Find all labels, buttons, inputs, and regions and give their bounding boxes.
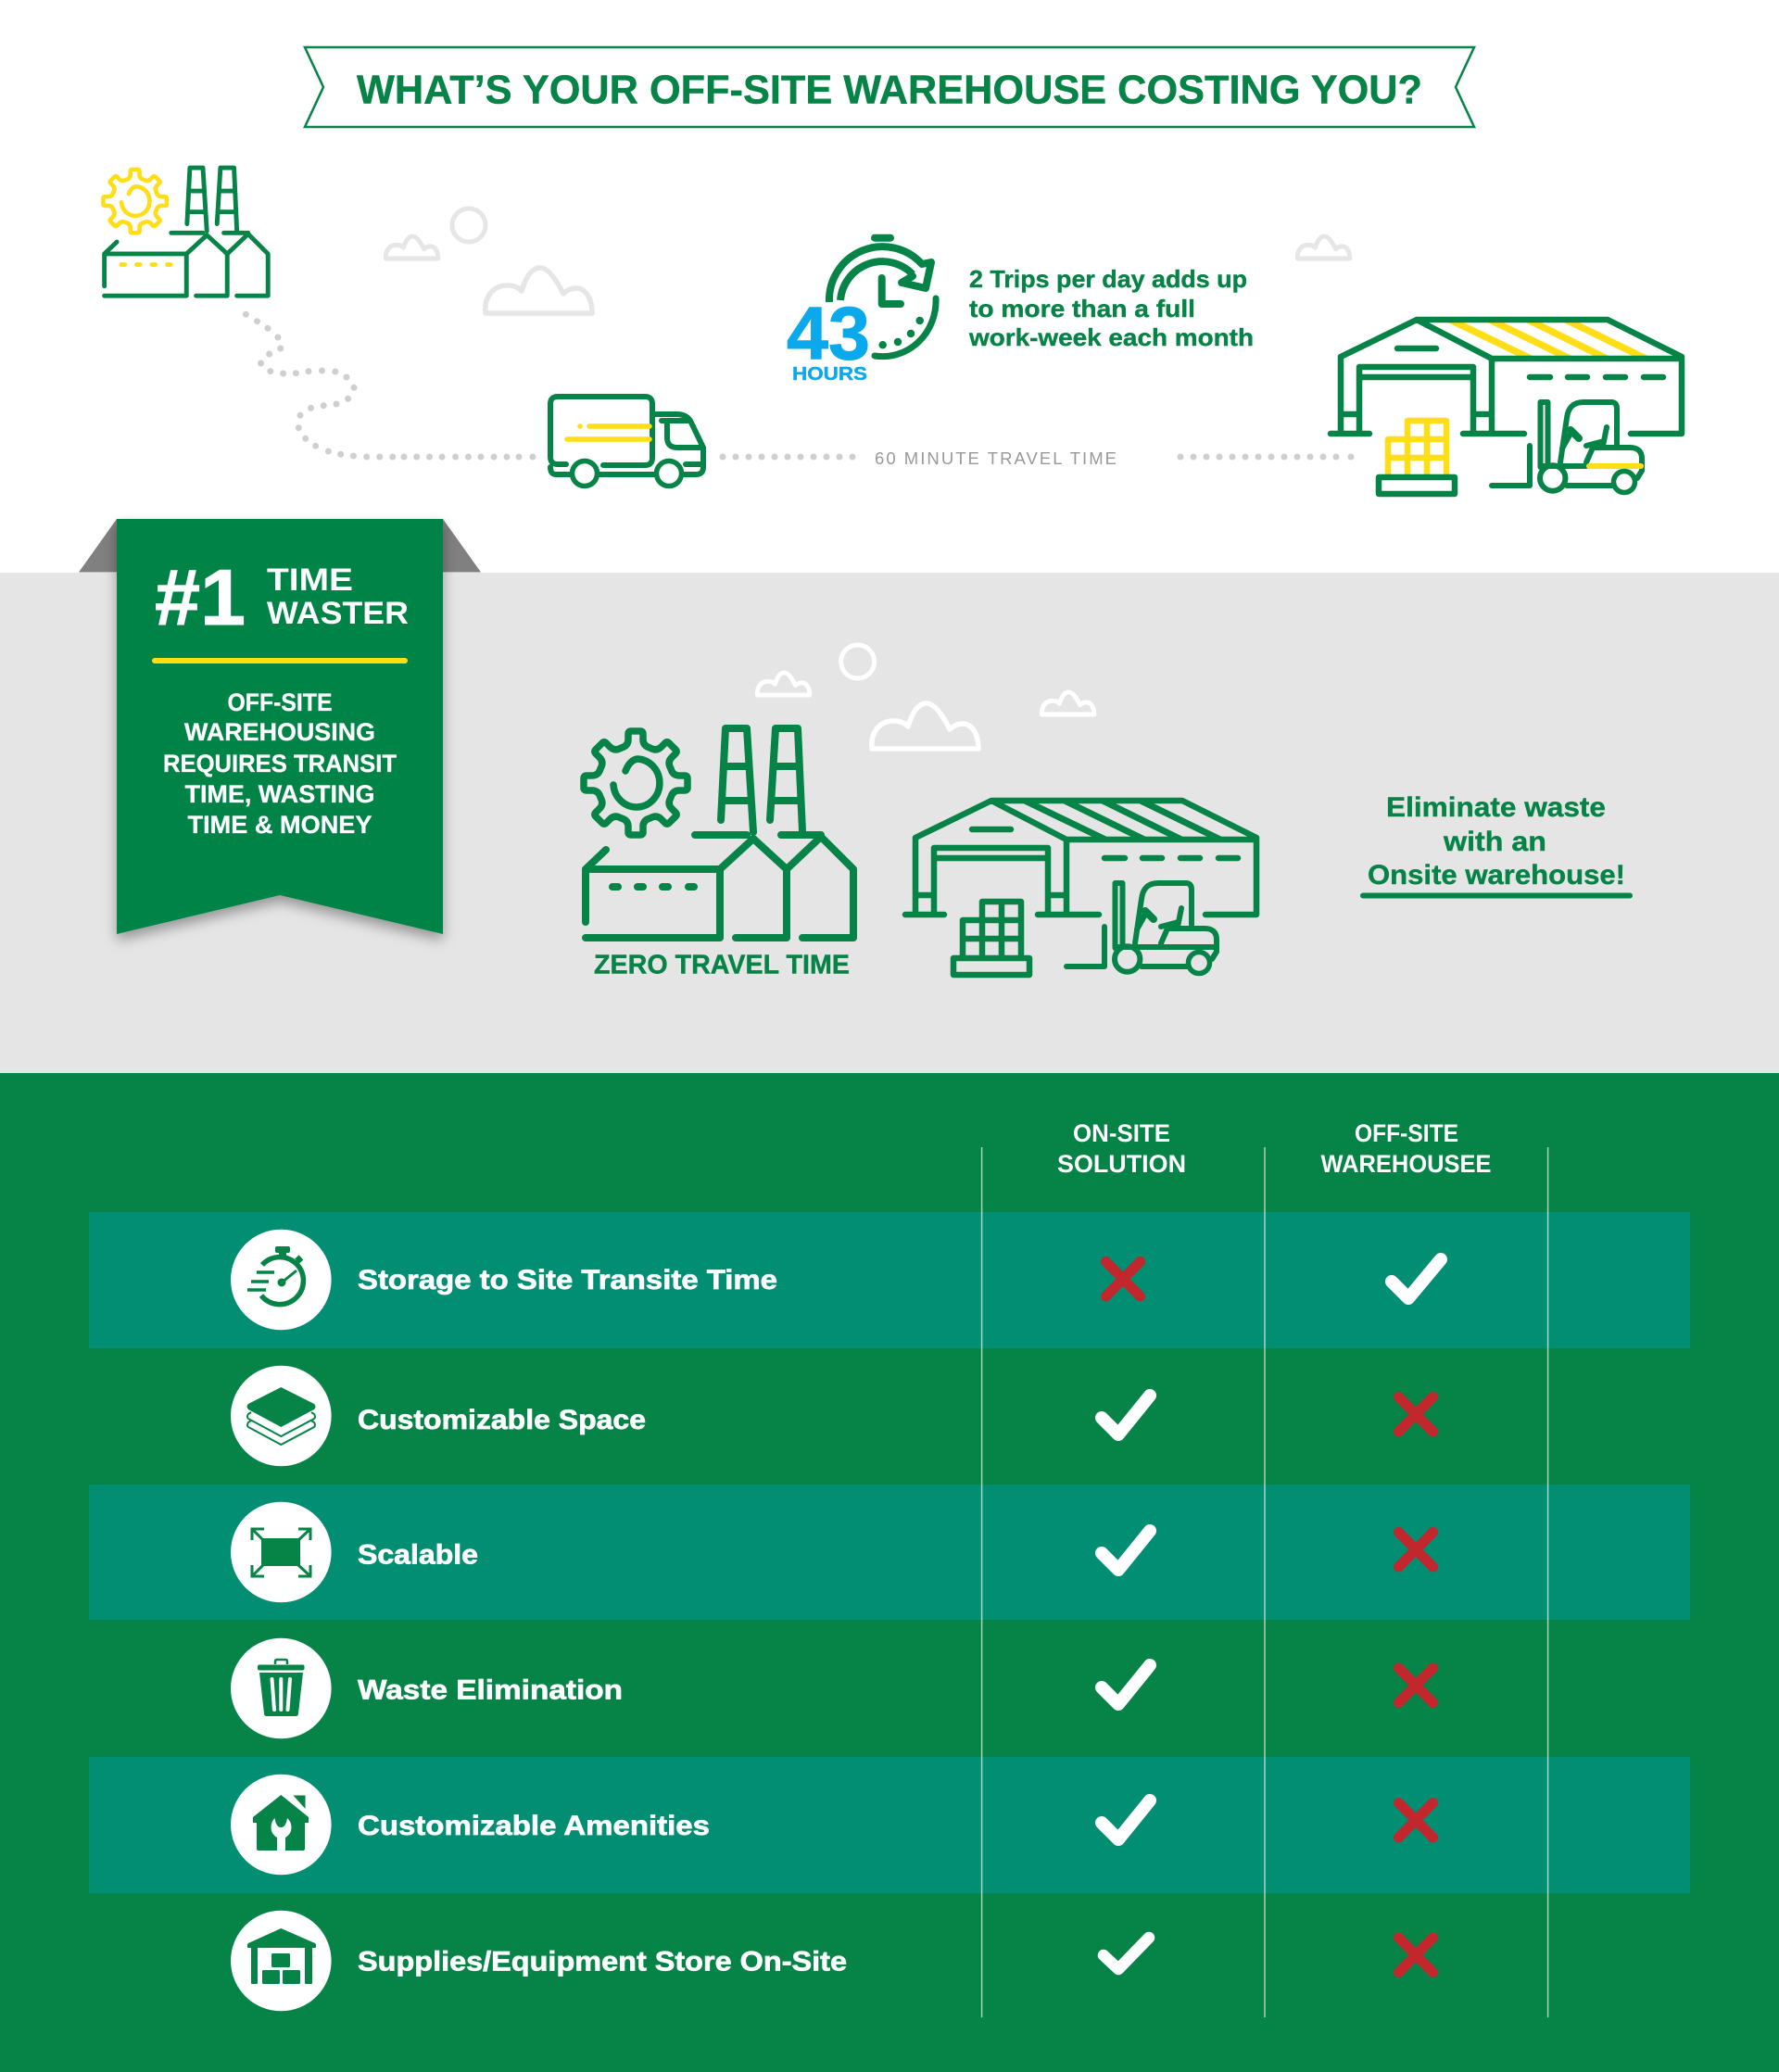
label: 60 minute travel time: 60 MINUTE TRAVEL TIME [875,449,1117,468]
mark: off-site cross [1399,1803,1432,1838]
text: 2 trips per day: 2 Trips per day adds up [969,265,1247,293]
row 3: scalable: Scalable [358,1540,478,1570]
text: 2 trips per day: to more than a full [969,295,1195,322]
icon: house with wrench [253,1795,309,1851]
mark: off-site cross [1399,1397,1432,1432]
mark: on-site check [1102,1531,1150,1570]
column heading: on-site solution: ON-SITE [1073,1119,1170,1147]
ribbon: #1 time waster: WAREHOUSING [184,718,375,746]
cloud: top small left [385,236,438,259]
cloud: gray band large [872,703,978,749]
column heading: off-site warehousee: WAREHOUSEE [1321,1150,1492,1178]
stat: 43 hours stopwatch [787,238,936,385]
dotted route: factory to truck [246,314,533,457]
row 6: supplies/equipment store on-site: Supplies/Equipment Store On-Site [358,1946,847,1977]
mark: on-site check [1104,1938,1149,1969]
table row band: storage to site [89,1212,1690,1348]
mark: on-site check [1102,1396,1150,1434]
mark: on-site check [1102,1665,1150,1704]
column heading: off-site warehousee [1321,1119,1492,1178]
table row band: customizable amenities [89,1757,1690,1893]
icon: stopwatch [247,1246,303,1305]
column heading: on-site solution: SOLUTION [1057,1150,1186,1178]
sun circle [452,208,486,242]
icon: scale arrows [252,1529,310,1576]
cloud: gray band left [757,673,810,695]
row 2: customizable space: Customizable Space [358,1405,646,1435]
stat: 43 hours stopwatch: HOURS [792,364,867,385]
column heading: on-site solution [1057,1119,1186,1178]
callout: eliminate waste: with an [1443,827,1546,857]
icon: layers [246,1387,315,1445]
callout: eliminate waste: Eliminate waste [1386,792,1606,823]
dotted route: truck to label [723,454,852,460]
title banner [305,47,1474,127]
table row band: scalable [89,1485,1690,1620]
dotted route: label to warehouse [1180,454,1351,460]
icon: warehouse with boxes [247,1928,316,1984]
label: zero travel time: ZERO TRAVEL TIME [594,951,850,980]
callout: eliminate waste [1363,792,1630,895]
cloud: gray band right [1041,692,1094,714]
ribbon: #1 time waster: OFF-SITE [228,689,332,716]
row 3: scalable [231,1502,1432,1602]
row 5: customizable amenities [231,1775,1432,1875]
icon: top warehouse with forklift [1331,320,1682,494]
panel: gray background band [0,573,1779,1073]
ribbon: #1 time waster: TIME, WASTING [185,780,374,808]
callout: eliminate waste: Onsite warehouse! [1368,860,1625,891]
ribbon: #1 time waster: REQUIRES TRANSIT [163,750,397,777]
cloud: top large [486,268,592,313]
sun circle: gray band [841,645,875,678]
title banner: WHAT’S YOUR OFF-SITE WAREHOUSE COSTING YOU? [357,67,1422,113]
text: 2 trips per day [968,265,1254,351]
icon: delivery truck [550,397,703,486]
row 4: waste elimination [231,1638,1432,1738]
ribbon: #1 time waster: TIME & MONEY [187,811,372,839]
mark: off-site check [1392,1259,1441,1298]
icon: small factory with yellow gear [103,168,268,296]
ribbon: #1 time waster: WASTER [267,596,409,631]
row 6: supplies/equipment store on-site [231,1911,1432,2011]
row 5: customizable amenities: Customizable Amenities [358,1811,710,1841]
stat: 43 hours stopwatch: 43 [787,293,870,376]
mark: on-site check [1102,1800,1150,1839]
icon: large factory with gear [584,728,853,938]
ribbon: #1 time waster [117,519,443,934]
icon: gray band warehouse with forklift [905,801,1256,975]
row 1: storage to site transite time: Storage to Site Transite Time [358,1265,777,1295]
row 1: storage to site transite time [231,1230,1441,1330]
icon: trash can [258,1660,304,1716]
panel: green comparison background [0,1073,1779,2072]
ribbon folds [79,519,481,573]
text: 2 trips per day: work-week each month [968,323,1254,351]
ribbon: #1 time waster: TIME [267,562,353,598]
mark: off-site cross [1399,1938,1432,1972]
column heading: off-site warehousee: OFF-SITE [1355,1119,1458,1147]
row 2: customizable space [231,1366,1432,1466]
ribbon: #1 time waster: #1 [155,554,246,642]
row 4: waste elimination: Waste Elimination [358,1675,623,1705]
cloud: top right [1297,236,1350,259]
table column dividers [982,1147,1548,2017]
mark: off-site cross [1399,1668,1432,1703]
mark: on-site cross [1106,1262,1140,1296]
mark: off-site cross [1399,1533,1432,1567]
